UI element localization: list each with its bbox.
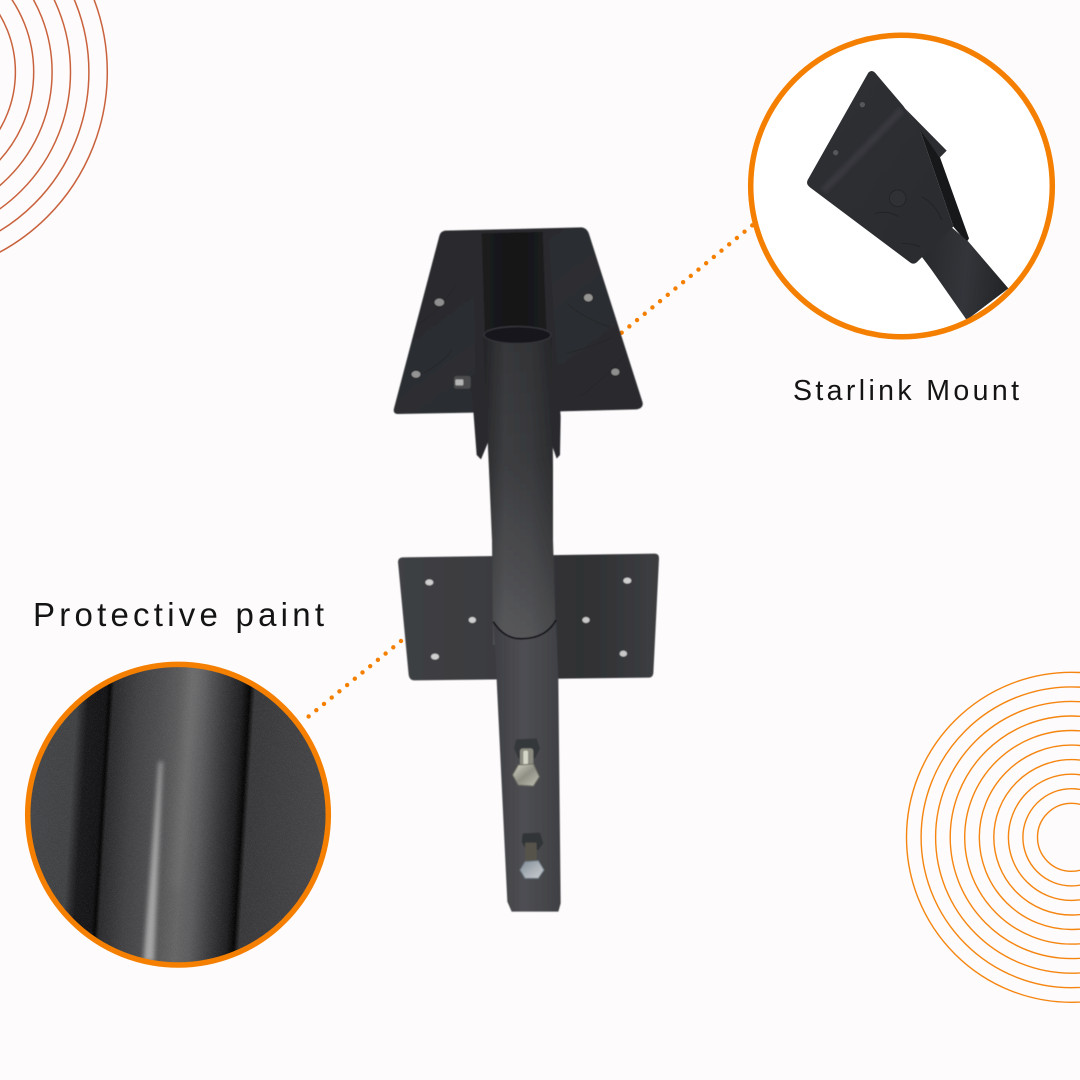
detail circle: Starlink mount (750, 35, 1052, 337)
detail photo: paint surface (30, 667, 326, 962)
label: Starlink Mount: Starlink Mount (793, 375, 1019, 407)
detail circle: protective paint (24, 662, 332, 968)
upper tube (483, 326, 556, 645)
adjustment bolts (513, 738, 544, 878)
orange ring (28, 664, 328, 965)
lower sleeve (493, 620, 561, 912)
label: Protective paint: Protective paint (33, 596, 324, 633)
dotted connector: mount to paint detail (301, 641, 401, 723)
dotted connector: mount to Starlink detail (622, 225, 752, 333)
lower wall plate (398, 554, 659, 680)
product: pole mount (394, 227, 659, 912)
detail photo: mount plate (807, 71, 1008, 320)
upper Starlink plate (394, 227, 643, 459)
orange ring (751, 35, 1052, 337)
decorative concentric rings: top left (0, 0, 107, 277)
decorative concentric rings: bottom right (906, 672, 1080, 1002)
